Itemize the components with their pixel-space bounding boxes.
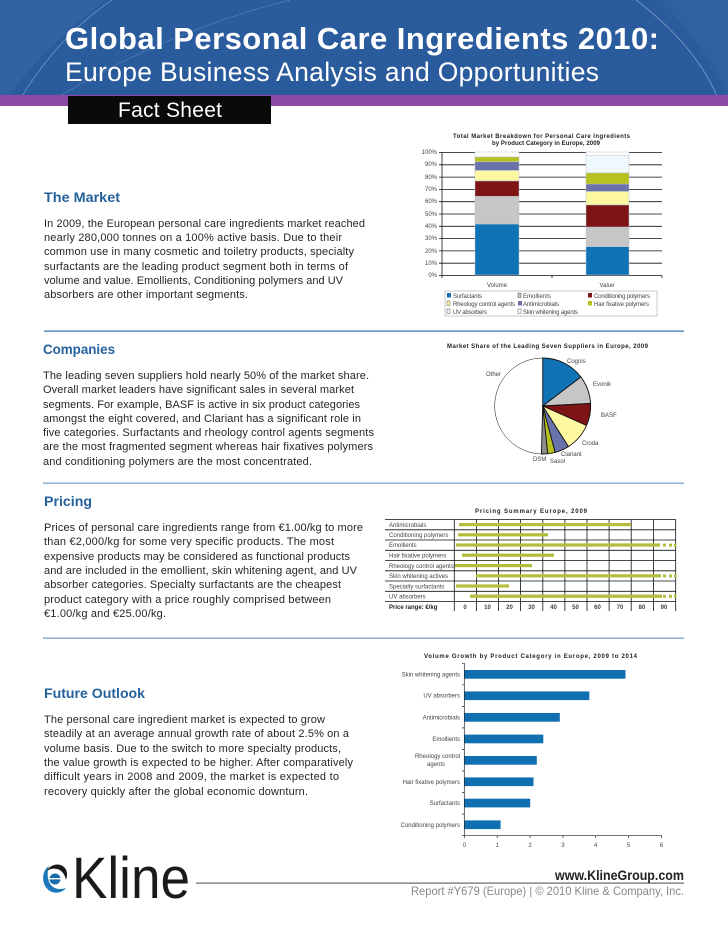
bar chart: volume growth: 1 — [496, 843, 500, 849]
stacked bar chart: market breakdown: 0% — [428, 273, 438, 279]
title: Global Personal Care Ingredients 2010: — [65, 21, 659, 56]
stacked bar chart: market breakdown — [422, 134, 662, 316]
text block: future outlook: volume basis. Due to the switch to more specialty products, — [44, 743, 341, 755]
bar chart: volume growth: 0 — [463, 843, 467, 849]
bar chart: volume growth: Emollients — [432, 737, 460, 743]
text block: the market: In 2009, the European personal care ingredients market reached — [44, 218, 365, 230]
pie chart: market share: Market Share of the Leading Seven Suppliers in Europe, 2009 — [447, 344, 649, 350]
text block: future outlook: steadily at an average annual growth rate of about 2.5% on a — [44, 728, 350, 740]
text block: pricing: absorber categories. Specialty surfactants are the cheapest — [44, 579, 341, 591]
stacked bar chart: market breakdown: 30% — [425, 236, 438, 242]
subtitle: Europe Business Analysis and Opportunities — [65, 57, 599, 87]
panel: pricing — [44, 493, 363, 620]
legend: Hair fixative polymers — [594, 302, 649, 308]
text block: pricing: than €2,000/kg for some very specific products. The most — [44, 536, 334, 548]
bar chart: volume growth: 4 — [594, 843, 598, 849]
text block: pricing: and are included in the emollient, skin whitening agent, and UV — [44, 565, 358, 577]
fact sheet tab — [68, 96, 271, 124]
stacked bar chart: market breakdown: by Product Category in Europe, 2009 — [492, 141, 601, 147]
stacked bar chart: market breakdown: 10% — [425, 261, 438, 267]
pricing chart: Skin whitening actives — [389, 574, 448, 580]
text block: future outlook: recovery quickly after the global economic downturn. — [44, 786, 308, 798]
website: www.KlineGroup.com — [554, 868, 684, 883]
text block: pricing — [44, 522, 363, 620]
stacked bar chart: market breakdown: Total Market Breakdown for Personal Care Ingredients — [453, 134, 631, 140]
pie chart: market share — [447, 344, 649, 465]
pricing chart: 30 — [528, 605, 535, 611]
text block: future outlook: The personal care ingredient market is expected to grow — [44, 714, 325, 726]
stacked bar chart: market breakdown: 100% — [422, 150, 438, 156]
pricing chart: 10 — [484, 605, 491, 611]
legend: Rheology control agents — [453, 302, 515, 308]
text block: pricing: expensive products may be considered as functional products — [44, 551, 350, 563]
heading: future outlook: Future Outlook — [44, 685, 145, 701]
header banner — [0, 0, 728, 124]
pie chart: market share: DSM — [533, 457, 546, 463]
bar chart: volume growth: Rheology control — [415, 754, 460, 760]
pie chart: market share: Evonik — [593, 382, 612, 388]
stacked bar chart: market breakdown: 20% — [425, 249, 438, 255]
pricing chart: Emollients — [389, 543, 417, 549]
stacked bar chart: market breakdown: 70% — [425, 187, 438, 193]
pricing chart: Price range: €/kg — [389, 605, 438, 611]
text block: the market: absorbers are other important segments. — [44, 289, 248, 301]
text block: pricing: product category with a price roughly comprised between — [44, 594, 331, 606]
text block: pricing: Prices of personal care ingredients range from €1.00/kg to more — [44, 522, 363, 534]
legend: Surfactants — [453, 294, 482, 300]
bar chart: volume growth: Volume Growth by Product Category in Europe, 2009 to 2014 — [424, 654, 638, 660]
stacked bar chart: market breakdown: 40% — [425, 224, 438, 230]
legend: Emollients — [523, 294, 551, 300]
pricing chart: 50 — [572, 605, 579, 611]
text block: companies: amongst the eight covered, and Clariant has a significant role in — [43, 413, 361, 425]
pricing chart: 80 — [639, 605, 646, 611]
text block: future outlook: difficult years in 2008 and 2009, the market is expected to — [44, 771, 339, 783]
text block: companies: The leading seven suppliers hold nearly 50% of the market share. — [43, 370, 369, 382]
pie chart: market share: BASF — [601, 413, 617, 419]
icon: kline logo mark — [43, 864, 67, 893]
stacked bar chart: market breakdown: 60% — [425, 199, 438, 205]
text block: pricing: €1.00/kg and €25.00/kg. — [44, 608, 166, 620]
pricing chart: Specialty surfactants — [389, 584, 444, 590]
text block: companies: and conditioning polymers are the most concentrated. — [43, 456, 312, 468]
text block: companies: Overall market leaders have significant sales in several market — [43, 384, 354, 396]
text block: the market: volume and value. Emollients, Conditioning polymers and UV — [44, 275, 344, 287]
legend: UV absorbers — [453, 310, 487, 316]
legend: Skin whitening agents — [523, 310, 578, 316]
text block: future outlook — [44, 714, 354, 798]
bar chart: volume growth: 5 — [627, 843, 631, 849]
pie chart: market share: Croda — [582, 441, 599, 447]
bar chart: volume growth: Antimicrobials — [423, 716, 460, 722]
pricing chart: 20 — [506, 605, 513, 611]
pricing chart: Antimicrobials — [389, 523, 426, 529]
pie chart: market share: Cognis — [567, 359, 586, 365]
heading: pricing: Pricing — [44, 493, 92, 509]
stacked bar chart: market breakdown: Value — [600, 283, 615, 289]
stacked bar chart: market breakdown: 90% — [425, 162, 438, 168]
legend: Antimicrobials — [523, 302, 559, 308]
footer — [43, 846, 684, 911]
heading: the market: The Market — [44, 189, 120, 205]
panel: future outlook — [44, 685, 354, 798]
bar chart: volume growth: UV absorbers — [423, 694, 460, 700]
text block: the market: nearly 280,000 tonnes on a 100% active basis. Due to their — [44, 232, 342, 244]
pricing chart: Pricing Summary Europe, 2009 — [475, 509, 588, 515]
pie chart: market share: Other — [486, 372, 501, 378]
pricing chart: Rheology control agents — [389, 564, 454, 570]
text block: companies: segments. For example, BASF is active in six product categories — [43, 399, 360, 411]
bar chart: volume growth: Skin whitening agents — [402, 672, 460, 678]
stacked bar chart: market breakdown: Volume — [487, 283, 508, 289]
stacked bar chart: market breakdown: 50% — [425, 212, 438, 218]
bar chart: volume growth: agents — [427, 762, 445, 768]
pricing chart: 60 — [594, 605, 601, 611]
bar chart: volume growth: Surfactants — [430, 801, 460, 807]
bar chart: volume growth: 2 — [528, 843, 532, 849]
pricing chart — [385, 509, 676, 611]
bar chart: volume growth: 3 — [561, 843, 565, 849]
text block: future outlook: the value growth is expected to be higher. After comparatively — [44, 757, 354, 769]
pricing chart: 70 — [617, 605, 624, 611]
legend — [445, 291, 657, 316]
pricing chart: 90 — [661, 605, 668, 611]
heading: companies: Companies — [43, 341, 115, 357]
text block: companies: are the most fragmented segment whereas hair fixatives polymers — [43, 441, 374, 453]
pricing chart: 40 — [550, 605, 557, 611]
legend: Conditioning polymers — [594, 294, 650, 300]
pricing chart: UV absorbers — [389, 594, 426, 600]
text block: the market — [44, 218, 365, 301]
bar chart: volume growth — [401, 654, 664, 849]
report line: Report #Y679 (Europe) | © 2010 Kline & Company, Inc. — [411, 884, 684, 898]
text block: the market: common use in many cosmetic and toiletry products, specialty — [44, 246, 354, 258]
text block: companies: five categories. Surfactants and rheology control agents segments — [43, 427, 374, 439]
pricing chart: Conditioning polymers — [389, 533, 448, 539]
text block: companies — [43, 370, 374, 468]
fact sheet tab: Fact Sheet — [118, 99, 222, 122]
panel: the market — [44, 189, 365, 301]
text block: the market: surfactants are the leading product segment both in terms of — [44, 261, 349, 273]
pricing chart: 0 — [463, 605, 467, 611]
pie chart: market share: Sasol — [550, 459, 565, 465]
bar chart: volume growth: 6 — [660, 843, 664, 849]
pricing chart: Hair fixative polymers — [389, 554, 446, 560]
logo wordmark: Kline — [72, 846, 190, 911]
bar chart: volume growth: Hair fixative polymers — [403, 780, 460, 786]
pie chart: market share: Clariant — [561, 452, 582, 458]
stacked bar chart: market breakdown: 80% — [425, 175, 438, 181]
bar chart: volume growth: Conditioning polymers — [401, 823, 460, 829]
panel: companies — [43, 341, 374, 468]
